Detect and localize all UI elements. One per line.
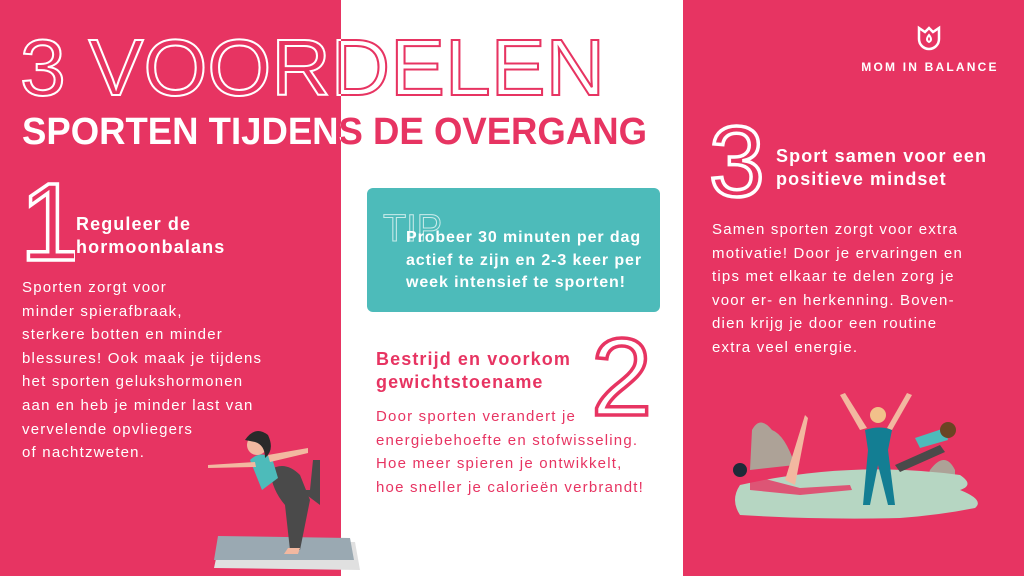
illustration: group workout [733, 393, 978, 519]
text 1: het sporten gelukshormonen [22, 373, 243, 390]
heading 2: Bestrijd en voorkom [376, 349, 571, 369]
text 2 [376, 408, 644, 496]
text 1: aan en heb je minder last van [22, 397, 254, 414]
text 2: Hoe meer spieren je ontwikkelt, [376, 455, 622, 472]
title: SPORTEN TIJDENS DE OVERGANG [22, 111, 647, 153]
title: SPORTEN TIJDENS DE OVERGANG [22, 111, 647, 153]
text 3: motivatie! Door je ervaringen en [712, 245, 963, 262]
heading 3 [776, 146, 987, 189]
logo [861, 26, 999, 74]
icon: tulip [918, 26, 940, 50]
title: 3 VOORDELEN [20, 23, 605, 112]
text 2: energiebehoefte en stofwisseling. [376, 432, 638, 449]
text 1: of nachtzweten. [22, 444, 145, 461]
text 3: dien krijg je door een routine [712, 315, 937, 332]
text 3: extra veel energie. [712, 339, 858, 356]
tip text: actief te zijn en 2-3 keer per [406, 252, 642, 268]
heading 1: Reguleer de [76, 214, 191, 234]
text 1: vervelende opvliegers [22, 421, 193, 438]
illustration: yoga woman [208, 431, 360, 570]
tip text: Probeer 30 minuten per dag [406, 229, 641, 246]
heading 2 [376, 349, 571, 392]
text 2: Door sporten verandert je [376, 408, 576, 425]
logo: MOM IN BALANCE [861, 60, 999, 74]
title: 3 VOORDELEN [20, 23, 605, 112]
text 1: minder spierafbraak, [22, 303, 183, 320]
tip box [367, 188, 660, 312]
heading 1 [76, 214, 225, 257]
text 1: Sporten zorgt voor [22, 279, 167, 296]
heading 3: Sport samen voor een [776, 146, 987, 166]
text 1: sterkere botten en minder [22, 326, 223, 343]
panel: right [683, 0, 1024, 576]
text 3 [712, 221, 963, 356]
tip text [406, 229, 642, 291]
text 3: Samen sporten zorgt voor extra [712, 221, 958, 238]
text 1 [22, 279, 262, 461]
text 1: blessures! Ook maak je tijdens [22, 350, 262, 367]
tip text: week intensief te sporten! [406, 274, 626, 291]
heading 2: gewichtstoename [376, 372, 544, 392]
heading 3: positieve mindset [776, 169, 947, 189]
panel: left [0, 0, 341, 576]
text 3: tips met elkaar te delen zorg je [712, 268, 955, 285]
title [22, 38, 645, 144]
heading 1: hormoonbalans [76, 237, 225, 257]
text 3: voor er- en herkenning. Boven- [712, 292, 955, 309]
text 2: hoe sneller je calorieën verbrandt! [376, 479, 644, 496]
